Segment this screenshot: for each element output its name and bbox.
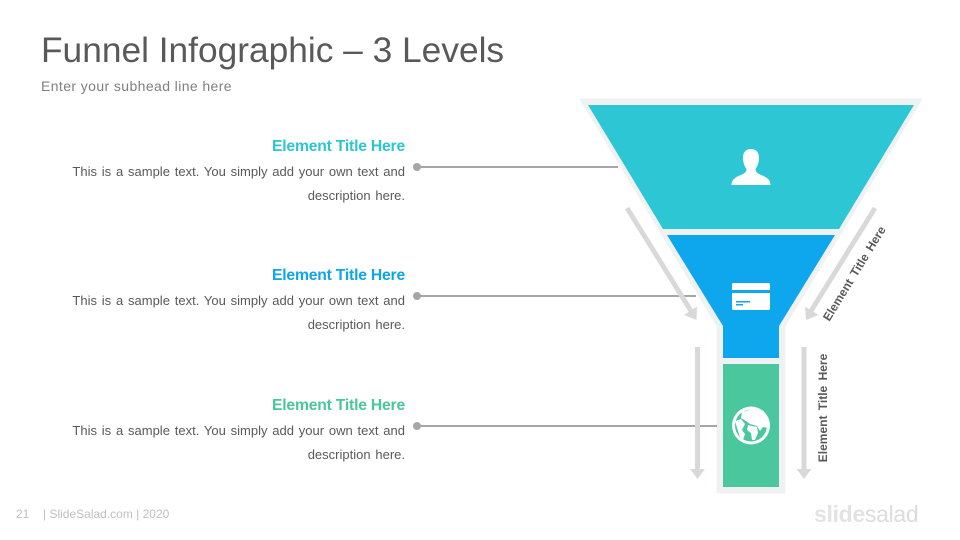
- arrow: left diagonal: [625, 207, 697, 320]
- icon: credit card: [732, 283, 770, 310]
- icon: globe: [732, 406, 770, 444]
- funnel level 2: blue: [667, 235, 835, 358]
- footer text: | SlideSalad.com | 2020: [43, 507, 169, 521]
- level 1 title: Element Title Here: [272, 138, 405, 155]
- level 3 description: This is a sample text. You simply add your own text and description here.: [72, 423, 405, 462]
- arrow: left vertical: [690, 347, 705, 479]
- icon: person: [732, 149, 770, 185]
- level 3 title: Element Title Here: [272, 397, 405, 414]
- level 2 description: This is a sample text. You simply add your own text and description here.: [72, 293, 405, 332]
- connector 3: [413, 422, 717, 430]
- level 1 description: This is a sample text. You simply add your own text and description here.: [72, 164, 405, 203]
- rotated label: vertical: Element Title Here: [816, 353, 830, 462]
- arrow: right diagonal: [805, 207, 877, 320]
- funnel outer frame: [580, 99, 922, 493]
- rotated label: diagonal: Element Title Here: [820, 223, 889, 323]
- connector 2: [413, 292, 696, 300]
- arrow: right vertical: [796, 347, 812, 479]
- subhead: Enter your subhead line here: [41, 78, 232, 94]
- page number: 21: [16, 507, 29, 521]
- level 2 title: Element Title Here: [272, 267, 405, 284]
- logo wordmark: slidesalad: [814, 501, 918, 527]
- funnel level 3: green: [723, 364, 779, 487]
- funnel level 1: teal: [588, 105, 914, 229]
- connector 1: [413, 163, 618, 171]
- title: Funnel Infographic – 3 Levels: [41, 31, 504, 70]
